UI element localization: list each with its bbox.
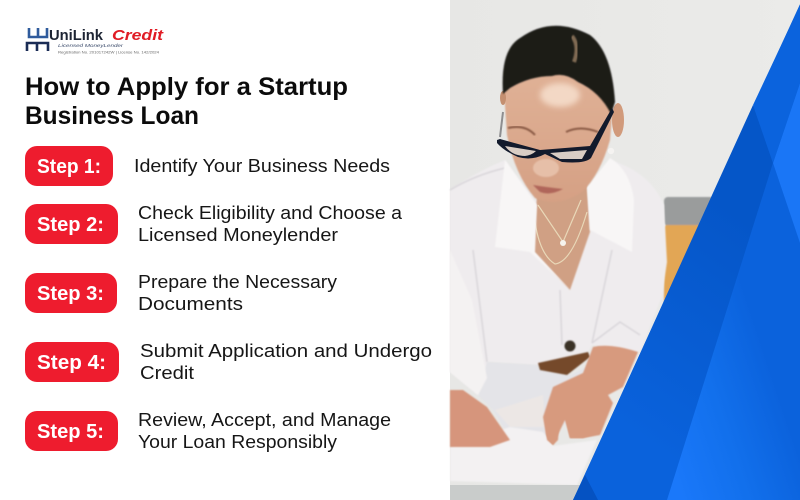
wall	[450, 0, 800, 500]
ear and earring	[500, 91, 624, 154]
step 2 text: Check Eligibility and Choose a	[138, 203, 403, 223]
step 5 text	[138, 410, 391, 452]
step 5	[25, 410, 391, 452]
bottom dark triangle	[573, 475, 598, 500]
shirt shading	[450, 168, 640, 362]
step 2 pill	[25, 204, 118, 244]
logo wordmark: UniLink	[49, 27, 104, 44]
hair part	[572, 36, 577, 62]
arm and right hand	[543, 346, 638, 445]
step 2 label: Step 2:	[37, 214, 104, 236]
right-hand fingers over paper	[545, 405, 605, 445]
step 1 text: Identify Your Business Needs	[134, 156, 390, 176]
step 1 label: Step 1:	[37, 156, 101, 178]
shirt body	[450, 160, 667, 395]
dark facet	[585, 105, 773, 500]
bright facet	[773, 83, 800, 243]
step 4 text: Credit	[140, 363, 194, 383]
photo: woman reviewing documents	[450, 0, 800, 500]
left hand	[450, 390, 510, 447]
step 4 text: Submit Application and Undergo	[140, 341, 432, 361]
step 3 text: Prepare the Necessary	[138, 272, 337, 292]
forehead highlight	[540, 83, 580, 107]
title: How to Apply for a Startup	[25, 73, 348, 101]
step 4 label: Step 4:	[37, 352, 106, 374]
step 2 text	[138, 203, 403, 245]
belt	[538, 340, 590, 375]
step 1	[25, 146, 390, 186]
glasses	[497, 108, 614, 162]
hair	[503, 26, 615, 114]
skirt lower fold	[495, 395, 545, 427]
left sleeve	[450, 250, 487, 395]
title	[25, 73, 348, 130]
step 3	[25, 272, 337, 314]
sofa and cushion	[664, 197, 714, 305]
nose and lips	[533, 159, 563, 193]
paper	[450, 427, 597, 485]
step 2	[25, 203, 403, 245]
step 5 text: Your Loan Responsibly	[138, 432, 337, 452]
base blue panel	[573, 2, 800, 500]
blue angular shape	[573, 2, 800, 500]
step 1 pill	[25, 146, 113, 186]
logo	[27, 27, 164, 54]
step 3 text: Documents	[138, 294, 243, 314]
neck	[533, 185, 590, 290]
logo: Credit	[112, 27, 164, 44]
upper blue facet	[753, 5, 800, 163]
step 5 text: Review, Accept, and Manage	[138, 410, 391, 430]
step 4	[25, 341, 432, 383]
eyebrows	[508, 127, 598, 135]
collar	[495, 158, 634, 290]
step 2 text: Licensed Moneylender	[138, 225, 338, 245]
lower blue panel	[667, 163, 800, 500]
skirt	[478, 362, 590, 440]
necklace	[535, 200, 587, 264]
pendant	[560, 240, 566, 246]
step 5 pill	[25, 411, 118, 451]
logo mark	[27, 28, 48, 51]
logo tagline: Licensed MoneyLender	[58, 43, 124, 48]
step 4 text	[140, 341, 432, 383]
white background panel	[0, 0, 450, 500]
shirt button	[564, 340, 576, 352]
face	[504, 72, 613, 202]
step 3 text	[138, 272, 337, 314]
step 3 label: Step 3:	[37, 283, 104, 305]
step 3 pill	[25, 273, 117, 313]
logo registration: Registration No. 201017242W | License No. 142/2024	[58, 50, 159, 54]
title: Business Loan	[25, 102, 199, 130]
step 4 pill	[25, 342, 119, 382]
lower shirt below paper	[450, 485, 580, 500]
step 5 label: Step 5:	[37, 421, 104, 443]
